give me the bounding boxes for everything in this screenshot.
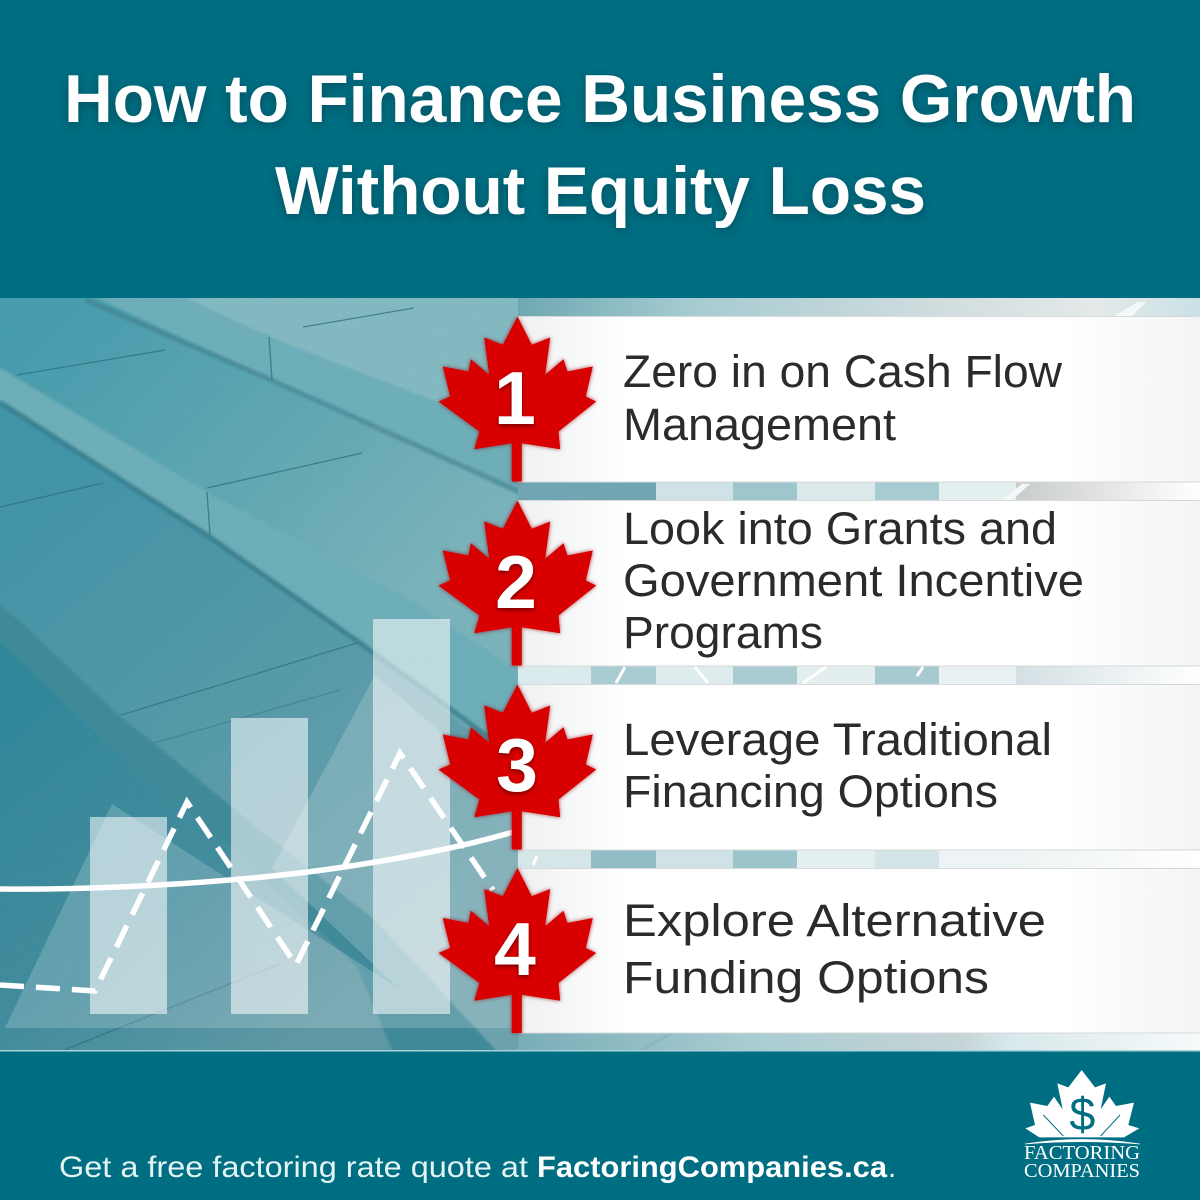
number 1: 1 (494, 356, 536, 440)
header band (0, 0, 1200, 298)
title: How to Finance Business Growth (64, 61, 1136, 137)
step 2 text (623, 503, 1084, 658)
icon: maple leaf 3 (438, 684, 596, 850)
panel: step 4 card (518, 868, 1200, 1033)
step 4 text (623, 895, 1046, 1003)
step 2 text: Programs (623, 607, 823, 658)
footer call to action: . (888, 1151, 896, 1184)
step 2 (438, 500, 1200, 666)
step 3 text: Financing Options (623, 766, 998, 817)
panel: step 3 card (518, 684, 1200, 850)
step 2 text: Government Incentive (623, 555, 1084, 606)
logo wordmark: FACTORING (1024, 1142, 1140, 1164)
number 3: 3 (496, 723, 538, 807)
step 2 text: Look into Grants and (623, 503, 1057, 554)
step 1 text: Management (623, 399, 897, 450)
strips between cards (518, 298, 1200, 1051)
icon: maple leaf 4 (438, 868, 596, 1033)
step 3 (438, 684, 1200, 850)
panel: step 1 card (518, 316, 1200, 482)
step 3 text: Leverage Traditional (623, 714, 1052, 765)
title: Without Equity Loss (275, 153, 926, 229)
title (64, 61, 1136, 229)
step 4 text: Funding Options (623, 952, 989, 1003)
number 4: 4 (494, 907, 536, 991)
number 2: 2 (495, 540, 537, 624)
footer call to action (59, 1151, 896, 1184)
logo wordmark: COMPANIES (1024, 1160, 1140, 1182)
logo: Factoring Companies (1024, 1070, 1140, 1182)
step 1 text: Zero in on Cash Flow (623, 346, 1063, 397)
icon: logo maple leaf with dollar sign: $ (1069, 1088, 1095, 1140)
dashed trend line (0, 753, 493, 991)
solid trend curve (0, 830, 520, 889)
staircase photo background (0, 298, 518, 1050)
panel: step 2 card (518, 500, 1200, 666)
step 3 text (623, 714, 1052, 817)
footer band (0, 1050, 1200, 1200)
logo wordmark (1024, 1142, 1140, 1182)
chart area triangles (5, 675, 530, 1028)
step 4 text: Explore Alternative (623, 895, 1046, 946)
step 4 (438, 868, 1200, 1033)
step 1 text (623, 346, 1063, 450)
footer call to action: Get a free factoring rate quote at (59, 1151, 528, 1184)
step 1 (438, 316, 1200, 482)
chart overlay: triangles, bars and lines (0, 619, 530, 1028)
icon: maple leaf 1 (438, 316, 596, 482)
bar chart (90, 619, 450, 1014)
footer call to action: FactoringCompanies.ca (537, 1151, 888, 1184)
icon: maple leaf 2 (438, 500, 596, 666)
